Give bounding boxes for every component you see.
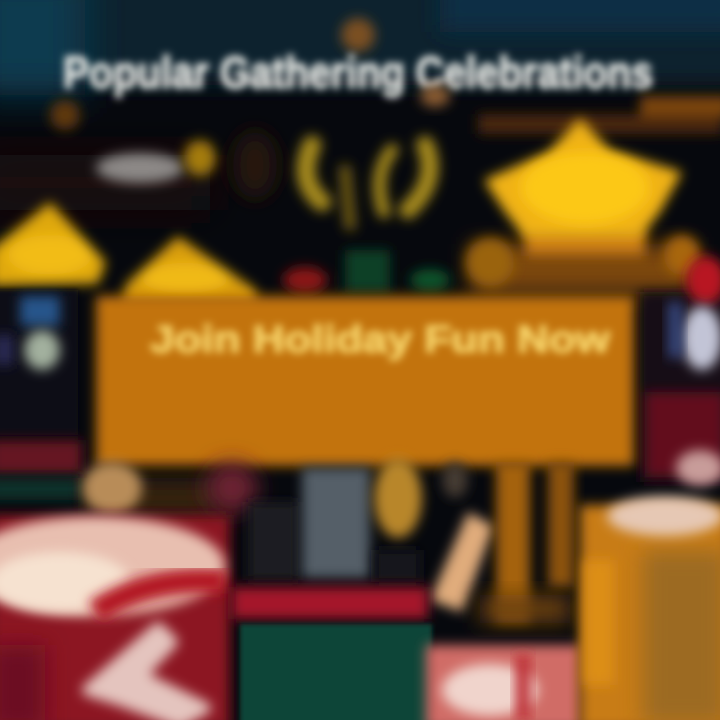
icon: small left medallion bbox=[50, 100, 80, 130]
label: left caption bbox=[96, 140, 216, 183]
icon: beer mug bbox=[580, 450, 720, 720]
banner text: Join Holiday Fun Now bbox=[150, 319, 611, 361]
icon: second yellow canopy bbox=[122, 236, 256, 304]
panel: dark green box bbox=[240, 624, 432, 720]
panel: central orange banner bbox=[96, 296, 634, 466]
panel: red ribbon strip bbox=[232, 587, 428, 619]
icon: big gold star bbox=[466, 118, 700, 294]
icon: green and red ornaments bbox=[283, 250, 450, 293]
panel: crowd of people bbox=[82, 458, 574, 623]
icon: center brown figure bbox=[233, 131, 277, 199]
banner: upper right orange band bbox=[478, 96, 720, 134]
panel: left column poster bbox=[0, 290, 82, 500]
icon: top medallion bbox=[341, 18, 375, 52]
panel: red and white table, left bbox=[0, 515, 230, 720]
icon: title accent bbox=[420, 85, 450, 107]
icon: left yellow canopy bbox=[0, 202, 106, 286]
icon: gold laurel bbox=[306, 145, 430, 225]
panel: right column poster bbox=[640, 256, 720, 482]
panel: red and white table, right bbox=[426, 645, 581, 720]
